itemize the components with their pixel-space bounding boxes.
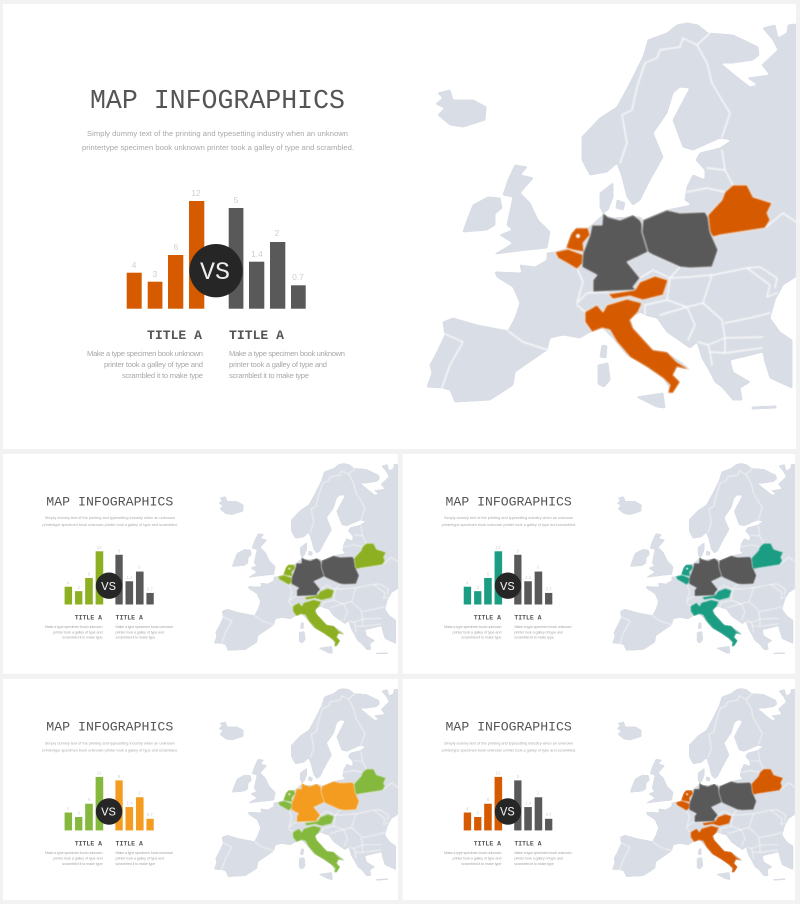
slide: green and amber version: TITLE A — [75, 840, 102, 847]
title A right: TITLE A — [229, 328, 284, 343]
slide: orange and dark version small: 5 — [517, 774, 520, 779]
bar values: 12 — [191, 188, 201, 198]
slide: teal and dark version — [402, 454, 795, 674]
body right: scrambled it to make type — [229, 371, 309, 380]
slide: orange and dark version small: scrambled it to make type — [514, 862, 554, 866]
slide: orange and dark version small: 3 — [477, 811, 480, 816]
body left: Make a type specimen book unknown — [87, 349, 203, 358]
slide: teal and dark version: TITLE A — [514, 614, 542, 621]
slide: green and dark version: TITLE A — [75, 614, 102, 621]
slide: green and amber version: Make a type specimen book unknown — [116, 851, 173, 855]
subtitle: Simply dummy text of the printing and typesetting industry when an unknown — [87, 129, 348, 138]
slide: green and dark version: printer took a galley of type and — [53, 630, 103, 634]
slide: green and dark version — [3, 454, 398, 674]
slide: green and amber version: Simply dummy text of the printing and typesetting industry when an unknown — [45, 742, 175, 746]
slide: green and dark version: 3 — [78, 585, 81, 590]
slide: green and amber version: 0.7 — [147, 812, 153, 817]
slide: green and amber version: 2 — [138, 790, 141, 795]
slide: green and dark version: 1.4 — [127, 575, 133, 580]
slide: teal and dark version: 6 — [487, 572, 490, 576]
slide: teal and dark version: 1.4 — [525, 575, 532, 580]
bar values: 6 — [174, 242, 179, 252]
slide: teal and dark version: scrambled it to make type — [514, 636, 554, 640]
slide: teal and dark version: VS — [500, 580, 515, 594]
slide: green and amber version: 6 — [88, 797, 91, 802]
slide: green and dark version: Make a type specimen book unknown — [45, 625, 103, 629]
subtitle — [82, 129, 354, 152]
slide: orange and dark version small: MAP INFOGRAPHICS — [446, 720, 572, 735]
body right: Make a type specimen book unknown — [229, 349, 345, 358]
slide: teal and dark version: printer took a galley of type and — [452, 630, 501, 634]
body right — [229, 349, 345, 380]
bar values: 1.4 — [251, 249, 263, 259]
slide: teal and dark version: Simply dummy text of the printing and typesetting industry when an unknown — [444, 516, 573, 520]
map of Europe — [427, 23, 796, 409]
slide: teal and dark version: 4 — [466, 580, 469, 585]
bar chart B — [229, 208, 306, 309]
slide: green and amber version: 4 — [67, 806, 70, 811]
slide: orange and dark version small: printer took a galley of type and — [452, 856, 501, 860]
slide: green and dark version: TITLE A — [116, 614, 143, 621]
slide: green and dark version: 12 — [97, 545, 102, 550]
slide: orange and dark version small: printertype specimen book unknown printer took a galley of type and scrambled. — [442, 749, 576, 753]
bar values: 5 — [234, 195, 239, 205]
slide: green and dark version: scrambled it to make type — [62, 636, 103, 640]
slide: green and amber version: 12 — [97, 770, 102, 775]
slide: teal and dark version: scrambled it to make type — [461, 636, 501, 640]
slide: green and amber version: VS — [101, 806, 116, 820]
body left: scrambled it to make type — [122, 371, 203, 380]
bar values: 2 — [275, 228, 280, 238]
slide: orange and dark version small: 6 — [487, 797, 490, 802]
slide: green and dark version: 2 — [138, 565, 141, 570]
slide: main orange and dark version — [3, 4, 796, 449]
slide: green and amber version: 5 — [118, 774, 121, 779]
slide: teal and dark version: 12 — [496, 545, 501, 550]
slide: teal and dark version: 3 — [477, 585, 480, 590]
slide: green and amber version: 1.4 — [127, 801, 133, 806]
slide: green and amber version: TITLE A — [116, 840, 143, 847]
slide: green and amber version: 3 — [78, 811, 81, 816]
slide: orange and dark version small: 0.7 — [546, 812, 552, 817]
body left: printer took a galley of type and — [104, 360, 203, 369]
slide: green and amber version — [3, 679, 398, 900]
bar values: 4 — [132, 260, 137, 270]
VS badge: VS — [200, 258, 230, 287]
bar values: 3 — [153, 269, 158, 279]
bar values: 0.7 — [292, 272, 304, 282]
slide: orange and dark version small: Simply dummy text of the printing and typesetting industry when an unknown — [444, 742, 573, 746]
panel background — [3, 4, 796, 449]
slide: green and amber version: printer took a galley of type and — [116, 856, 164, 860]
slide: green and dark version: printer took a galley of type and — [116, 630, 164, 634]
slide: green and dark version: 4 — [67, 580, 70, 585]
slide: green and dark version: 0.7 — [147, 586, 154, 591]
slide: green and amber version: MAP INFOGRAPHICS — [46, 720, 173, 735]
slide: green and amber version: scrambled it to make type — [116, 862, 155, 866]
slide: green and dark version: printertype specimen book unknown printer took a galley of type and scrambled. — [42, 523, 178, 527]
slide: orange and dark version small: TITLE A — [514, 840, 542, 847]
slide: green and amber version: Make a type specimen book unknown — [45, 851, 103, 855]
slide: teal and dark version: 0.7 — [546, 586, 552, 591]
slide: orange and dark version small: Make a type specimen book unknown — [514, 851, 572, 855]
slide: green and dark version: Make a type specimen book unknown — [116, 625, 173, 629]
slide: teal and dark version: TITLE A — [474, 614, 501, 621]
title A left: TITLE A — [147, 328, 202, 343]
slide: orange and dark version small: TITLE A — [474, 840, 501, 847]
body right: printer took a galley of type and — [229, 360, 327, 369]
slide: teal and dark version: Make a type specimen book unknown — [514, 625, 572, 629]
slide: green and dark version: VS — [101, 580, 116, 594]
slide: teal and dark version: MAP INFOGRAPHICS — [446, 494, 572, 509]
slide: green and amber version: printertype specimen book unknown printer took a galley of type and scrambled. — [42, 749, 178, 753]
slide: teal and dark version: printer took a galley of type and — [514, 630, 563, 634]
slide: green and dark version: 5 — [118, 548, 121, 553]
VS badge — [189, 244, 243, 297]
slide: green and dark version: Simply dummy text of the printing and typesetting industry when an unknown — [45, 516, 175, 520]
bar chart A — [127, 201, 204, 309]
slide: orange and dark version small: 1.4 — [525, 801, 532, 806]
body left — [87, 349, 203, 380]
slide: orange and dark version small: printer took a galley of type and — [514, 856, 563, 860]
slide: green and amber version: printer took a galley of type and — [53, 856, 103, 860]
slide: orange and dark version small: VS — [500, 806, 515, 820]
slide: teal and dark version: 2 — [537, 565, 540, 570]
slide: teal and dark version: Make a type specimen book unknown — [444, 625, 501, 629]
slide: green and amber version: scrambled it to make type — [62, 862, 103, 866]
slide: teal and dark version: printertype specimen book unknown printer took a galley of type and scrambled. — [442, 523, 576, 527]
slide: green and dark version: 6 — [88, 572, 91, 576]
slide: orange and dark version small: 4 — [466, 806, 469, 811]
slide: green and dark version: scrambled it to make type — [116, 636, 155, 640]
slide: orange and dark version small — [402, 679, 795, 900]
subtitle: printertype specimen book unknown printer took a galley of type and scrambled. — [82, 143, 354, 152]
slide: orange and dark version small: 2 — [537, 790, 540, 795]
bar values — [132, 188, 304, 282]
slide: orange and dark version small: 12 — [496, 770, 501, 775]
title: MAP INFOGRAPHICS — [90, 86, 345, 116]
slide: teal and dark version: 5 — [517, 548, 520, 553]
slide: green and dark version: MAP INFOGRAPHICS — [46, 494, 173, 509]
slide: orange and dark version small: Make a type specimen book unknown — [444, 851, 501, 855]
slide: orange and dark version small: scrambled it to make type — [461, 862, 501, 866]
